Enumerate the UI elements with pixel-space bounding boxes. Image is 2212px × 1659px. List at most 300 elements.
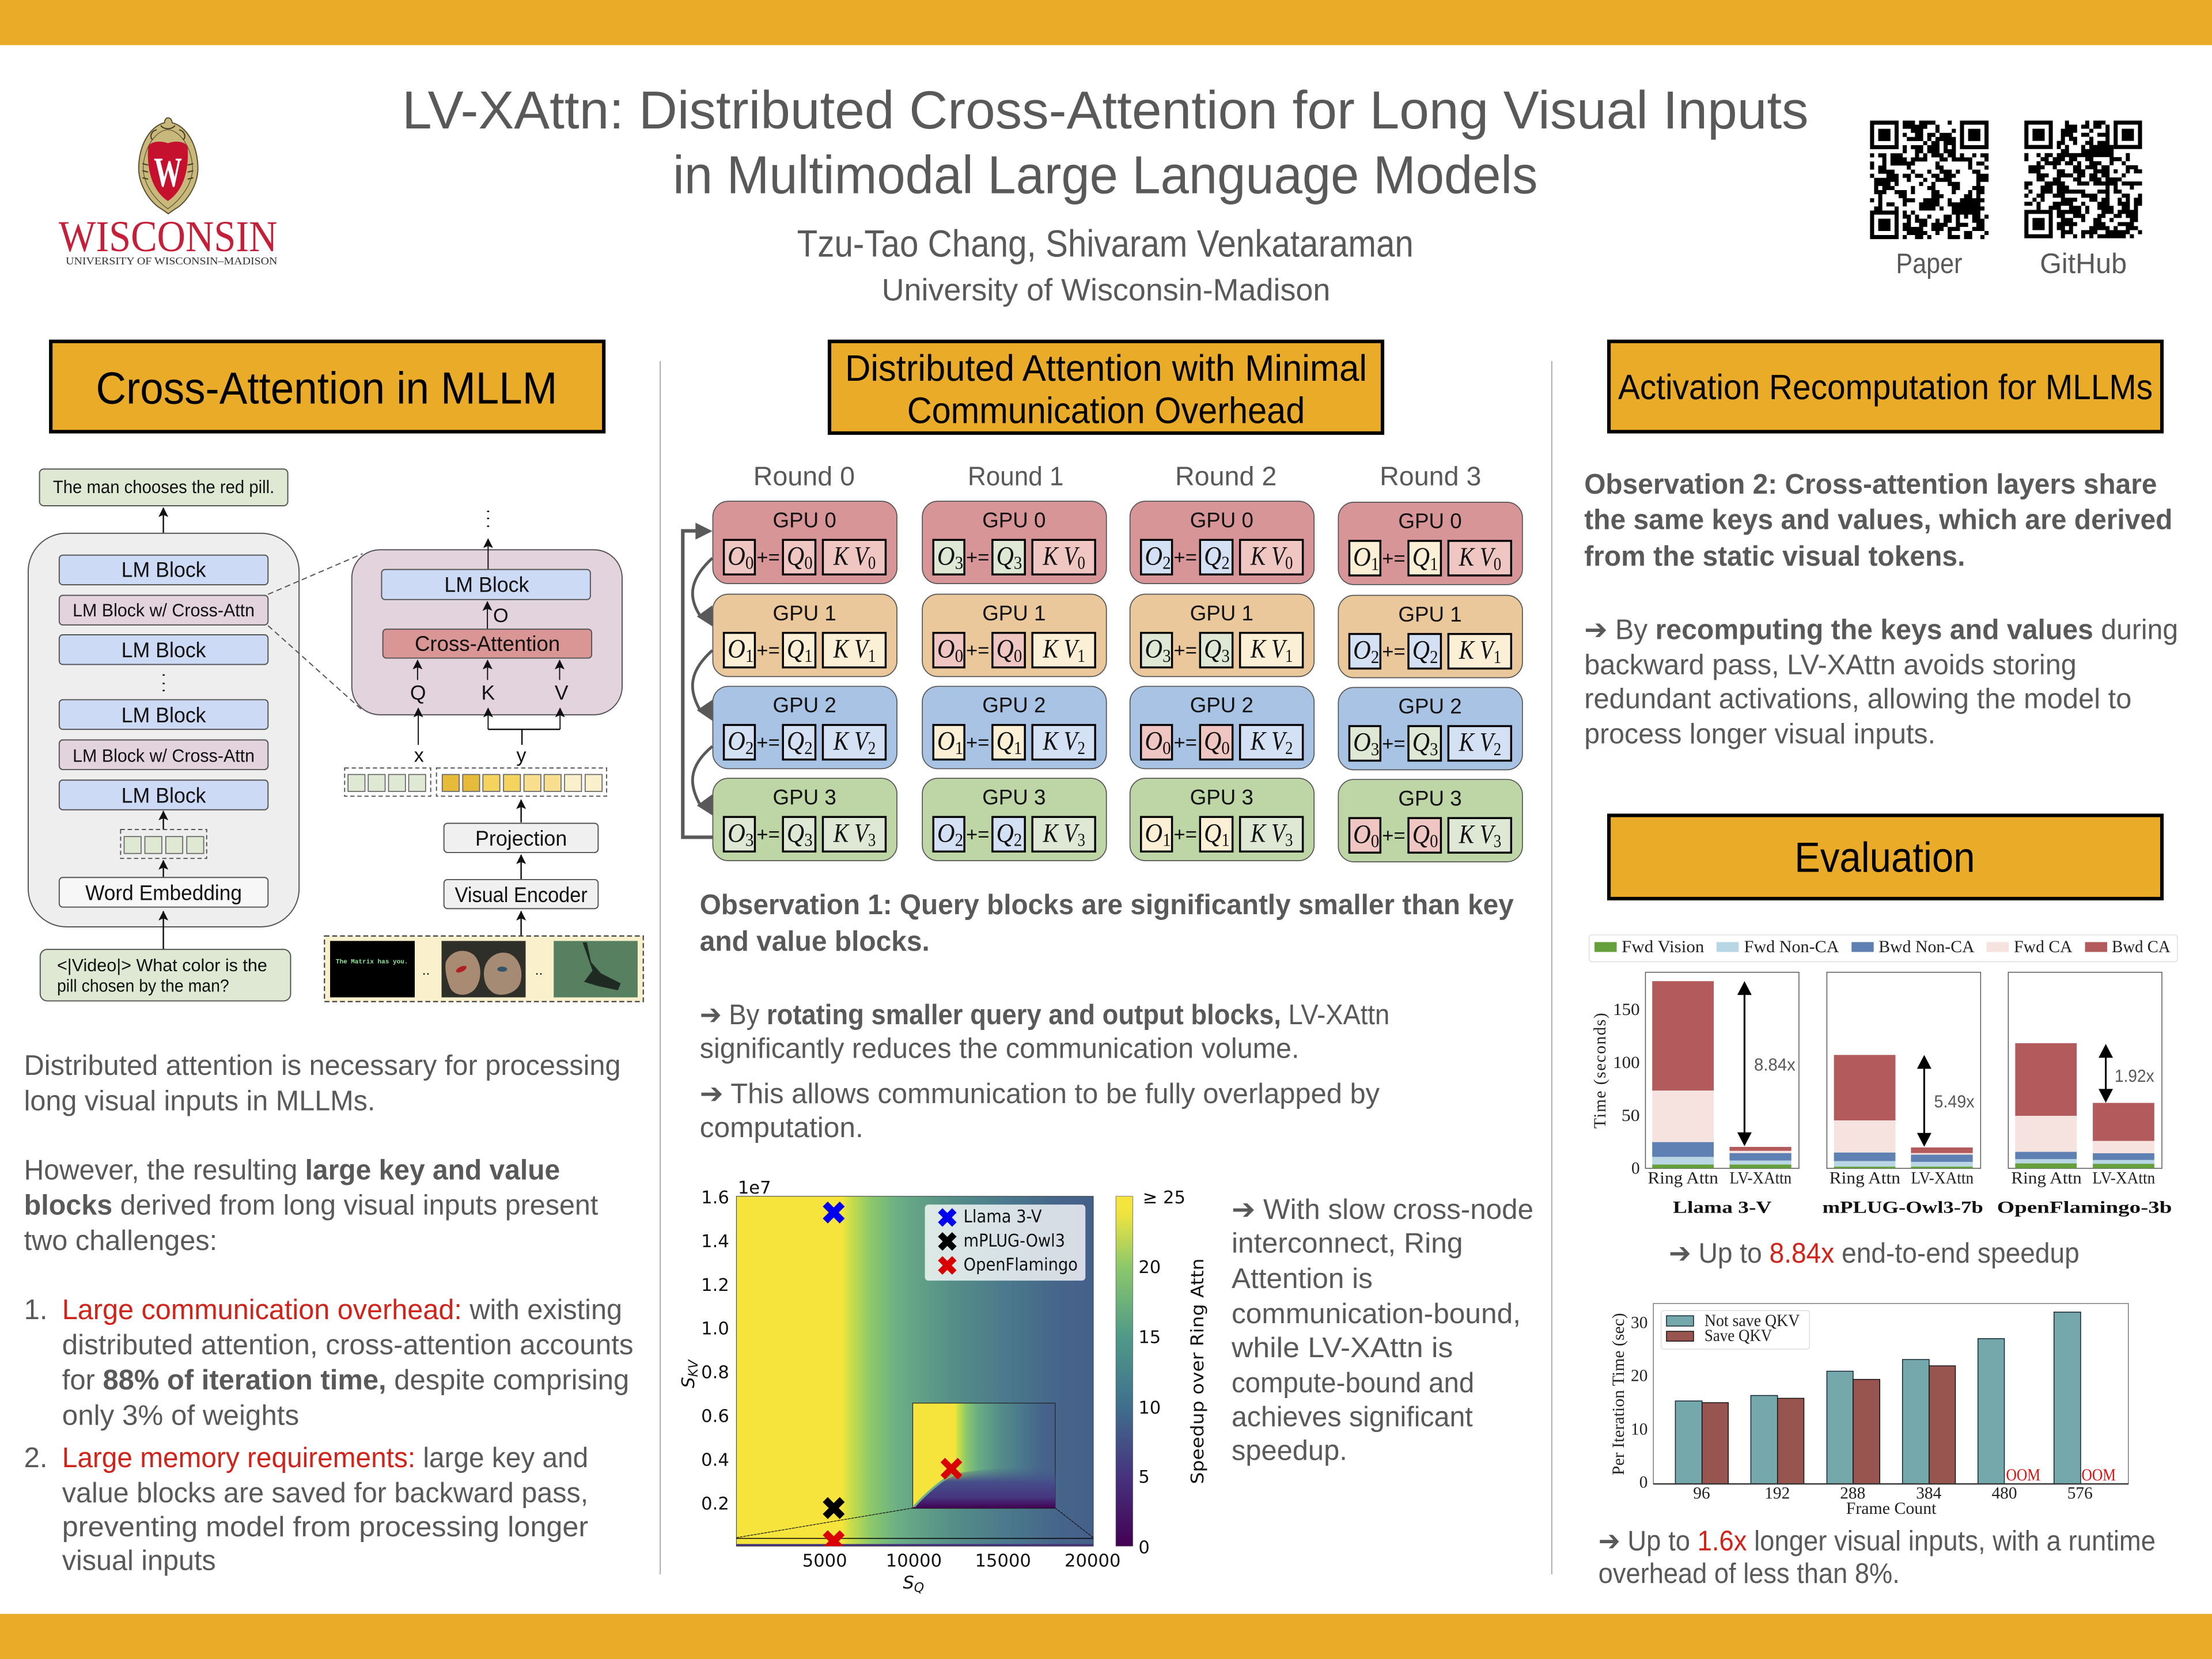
round headers: Round 1 [968, 461, 1064, 491]
colorbar: 5 [1138, 1467, 1150, 1487]
y-axis ticks: 1.0 [701, 1319, 729, 1339]
output box [40, 469, 288, 506]
cell: round 2 GPU 1: 1 [1285, 646, 1293, 666]
y-axis ticks: 0.6 [701, 1407, 729, 1427]
x-axis ticks: 5000 [802, 1551, 847, 1571]
cell: round 3 GPU 0: 0 [1494, 554, 1501, 574]
inset zoom [912, 1403, 1055, 1508]
cell: round 1 GPU 1: 0 [955, 646, 963, 666]
stacked bar chart: end-to-end time [1589, 935, 2177, 1217]
projection box [444, 823, 598, 853]
panel: Llama 3-V: LV-XAttn [1729, 1169, 1791, 1188]
cell: round 3 GPU 1: 1 [1494, 647, 1501, 667]
text block: left column: preventing model from processing longer [62, 1512, 588, 1543]
cell: round 3 GPU 0: Q [1412, 543, 1431, 572]
panel: Llama 3-V: Ring Attn [1647, 1169, 1718, 1188]
model names: Llama 3-V [1673, 1198, 1771, 1217]
heading: Activation Recomputation: Activation Recomputation for MLLMs [1618, 368, 2153, 407]
round headers: Round 0 [753, 461, 855, 491]
cell: round 3 GPU 2: GPU 2 [1398, 695, 1462, 718]
cell: round 1 GPU 3: 2 [1014, 830, 1022, 850]
text block: left column: only 3% of weights [62, 1400, 299, 1431]
y-axis label: KV [687, 1359, 701, 1377]
panel: OpenFlamingo-3b: 1.92x [2115, 1066, 2154, 1086]
y-axis ticks: 1e7 [738, 1178, 771, 1198]
text block: left column: 1. [24, 1294, 47, 1325]
round headers: Round 3 [1380, 461, 1481, 491]
cell: round 1 GPU 0: 0 [1078, 553, 1085, 573]
text block: observation 1: ➔ This allows communication to be fully overlapped by [700, 1078, 1380, 1109]
cell: round 0 GPU 1: K V [834, 635, 874, 664]
y-axis label: S [679, 1377, 699, 1388]
y-axis ticks: 0 [1631, 1160, 1640, 1178]
cell: round 3 GPU 1: += [1382, 641, 1406, 662]
cell: round 2 GPU 3: += [1174, 824, 1197, 846]
cell: round 2 GPU 1: O [1145, 635, 1164, 664]
panel: OpenFlamingo-3b [2008, 972, 2162, 1188]
cell: round 1 GPU 0: Q [996, 541, 1016, 571]
cell: round 0 GPU 2: Q [787, 727, 806, 756]
cell: round 3 GPU 3: GPU 3 [1398, 786, 1462, 810]
heading: Distributed Attention [830, 342, 1382, 433]
callout: 8.84x speedup: ➔ Up to 8.84x end-to-end speedup [1669, 1238, 2080, 1269]
logo: University of Wisconsin-Madison [59, 118, 277, 267]
cell: round 0 GPU 2: GPU 2 [773, 694, 836, 717]
cell: round 2 GPU 1: Q [1204, 635, 1224, 664]
text block: observation 2 [1584, 469, 2178, 750]
cross-attention block detail [352, 511, 622, 715]
cell: round 2 GPU 0: GPU 0 [1190, 508, 1253, 532]
x-axis ticks: 15000 [975, 1551, 1031, 1571]
cell: round 2 GPU 3 [1130, 778, 1314, 861]
wordmark: WISCONSIN [59, 213, 277, 261]
y-axis ticks: 100 [1613, 1054, 1640, 1072]
cell: round 1 GPU 0: 3 [955, 553, 963, 573]
text block: interconnect note: ➔ With slow cross-node [1232, 1194, 1533, 1225]
cell: round 2 GPU 2: GPU 2 [1190, 694, 1253, 717]
cell: round 2 GPU 3: GPU 3 [1190, 785, 1253, 809]
cell: round 0 GPU 2: 2 [868, 738, 876, 758]
video frames: .. [535, 963, 543, 978]
cell: round 1 GPU 0: += [966, 547, 989, 569]
cross-attention block detail: Cross-Attention [415, 632, 560, 656]
legend: Fwd Vision [1622, 938, 1705, 956]
panel: Llama 3-V [1645, 972, 1799, 1188]
cell: round 2 GPU 2: 0 [1162, 738, 1171, 758]
y-axis ticks: 1.6 [701, 1188, 729, 1208]
text block: observation 2: ➔ By recomputing the keys and values during [1584, 614, 2178, 645]
x-axis ticks: 576 [2067, 1484, 2093, 1502]
cell: round 2 GPU 1: += [1174, 639, 1197, 661]
round headers [753, 461, 1481, 491]
cell: round 1 GPU 2: O [937, 727, 956, 756]
cell: round 0 GPU 0 [713, 501, 897, 584]
cell: round 0 GPU 3: K V [834, 819, 874, 848]
text block: observation 1: and value blocks. [700, 926, 930, 957]
cell: round 3 GPU 3: 3 [1494, 831, 1501, 851]
text block: observation 2: the same keys and values, which are derived [1584, 504, 2172, 535]
text block: observation 2: from the static visual tokens. [1584, 541, 1965, 572]
cell: round 2 GPU 3: 1 [1162, 830, 1171, 850]
legend: Bwd Non-CA [1878, 938, 1975, 956]
frame: the matrix text [330, 941, 415, 997]
cell: round 3 GPU 3: Q [1412, 820, 1431, 849]
cell: round 3 GPU 0: O [1353, 543, 1373, 572]
cell: round 2 GPU 0: Q [1204, 541, 1224, 571]
cell: round 3 GPU 3: 0 [1371, 831, 1379, 851]
cell: round 0 GPU 0: 0 [868, 553, 876, 573]
cell: round 1 GPU 1: O [937, 635, 956, 664]
cell: round 1 GPU 3 [922, 778, 1107, 861]
cell: round 0 GPU 1: 1 [804, 646, 813, 666]
cell: round 0 GPU 1 [713, 594, 897, 677]
input prompt box: <|Video|> What color is the [57, 956, 267, 975]
text block: left column: visual inputs [62, 1546, 216, 1577]
language model stack: LM Block [122, 558, 206, 582]
y-axis title: Per Iteration Time (sec) [1609, 1313, 1628, 1475]
cell: round 2 GPU 0: K V [1251, 541, 1291, 571]
video frames [324, 936, 643, 1002]
text block: interconnect note: Attention is [1232, 1263, 1373, 1294]
cell: round 1 GPU 0: GPU 0 [982, 508, 1046, 532]
y-axis ticks [701, 1178, 771, 1514]
cell: round 0 GPU 3: += [756, 824, 780, 846]
title [402, 80, 1809, 205]
cell: round 1 GPU 1: Q [996, 635, 1016, 664]
text block: observation 2: Observation 2: Cross-attention layers share [1584, 469, 2157, 500]
cell: round 0 GPU 1: GPU 1 [773, 601, 836, 625]
cell: round 2 GPU 3: 1 [1221, 830, 1230, 850]
legend: Not save QKV [1705, 1312, 1800, 1330]
cross-attention block detail: LM Block [444, 573, 529, 596]
callout: longer visual inputs: ➔ Up to 1.6x longer visual inputs, with a runtime [1599, 1525, 2156, 1556]
cell: round 3 GPU 1: K V [1459, 636, 1500, 665]
heading: Cross-Attention in MLLM [51, 342, 604, 431]
frame: pills in hands [442, 941, 525, 997]
text block: left column: distributed attention, cross-attention accounts [62, 1330, 634, 1361]
cell: round 0 GPU 1: 1 [868, 646, 876, 666]
round headers: Round 2 [1175, 461, 1277, 491]
cell: round 3 GPU 0 [1338, 502, 1522, 585]
cell: round 3 GPU 1: 2 [1430, 647, 1438, 667]
cell: round 3 GPU 1: GPU 1 [1398, 603, 1462, 626]
cell: round 2 GPU 2: Q [1204, 727, 1224, 756]
output box: The man chooses the red pill. [53, 476, 274, 497]
x-axis label: S [903, 1573, 914, 1593]
cell: round 3 GPU 3: K V [1459, 820, 1500, 849]
OOM labels [2006, 1466, 2116, 1484]
bars: frame counts [1653, 1312, 2128, 1484]
cell: round 1 GPU 1: += [966, 639, 989, 661]
x-axis ticks: 480 [1991, 1484, 2017, 1502]
text block: observation 1: computation. [700, 1112, 863, 1143]
text block: observation 1 [700, 889, 1514, 1143]
legend: Bwd CA [2112, 938, 2171, 956]
token labels: x [414, 744, 424, 766]
heading: Distributed Attention: Communication Overhead [907, 391, 1305, 431]
cell: round 3 GPU 2: 3 [1430, 739, 1438, 759]
QR code: GitHub [2024, 123, 2142, 236]
model names: mPLUG-Owl3-7b [1823, 1198, 1983, 1217]
cell: round 1 GPU 2: 1 [955, 738, 963, 758]
input prompt box [40, 949, 290, 1001]
y-axis ticks: 0.2 [701, 1494, 729, 1514]
cell: round 2 GPU 0 [1130, 501, 1314, 584]
legend: OpenFlamingo [964, 1255, 1078, 1275]
cell: round 2 GPU 1: K V [1251, 635, 1291, 664]
cell: round 3 GPU 0: += [1382, 548, 1406, 570]
panel: Llama 3-V: 8.84x [1754, 1055, 1796, 1074]
cell: round 2 GPU 0: 0 [1285, 553, 1293, 573]
heading: Evaluation [1609, 816, 2162, 899]
cell: round 1 GPU 1: K V [1043, 635, 1084, 664]
y-axis ticks: 0.8 [701, 1363, 729, 1383]
callout: longer visual inputs: overhead of less than 8%. [1599, 1558, 1900, 1589]
cell: round 3 GPU 2: K V [1459, 728, 1500, 757]
cell: round 1 GPU 1: GPU 1 [982, 601, 1046, 625]
cell: round 1 GPU 2: K V [1043, 727, 1084, 756]
cell: round 0 GPU 3: O [728, 819, 747, 848]
text block: left column: value blocks are saved for backward pass, [62, 1478, 588, 1509]
text block: observation 1: Observation 1: Query blocks are significantly smaller than key [700, 889, 1514, 921]
cell: round 0 GPU 2: += [756, 732, 780, 753]
cell: round 2 GPU 2 [1130, 686, 1314, 768]
y-axis ticks: 0 [1639, 1473, 1647, 1491]
panel: mPLUG-Owl3-7b: Ring Attn [1830, 1169, 1900, 1188]
cell: round 1 GPU 0: K V [1043, 541, 1084, 571]
cell: round 2 GPU 3: Q [1204, 819, 1224, 848]
cell: round 2 GPU 2: 0 [1221, 738, 1230, 758]
cell: round 3 GPU 2: Q [1412, 728, 1431, 757]
y-axis ticks: 30 [1631, 1314, 1647, 1332]
y-axis ticks: 150 [1613, 1001, 1640, 1019]
icon: crest: W [154, 149, 182, 195]
text block: observation 1: ➔ By rotating smaller query and output blocks, LV-XAttn [700, 999, 1389, 1031]
cross-attention block detail: V [555, 681, 569, 704]
text block: interconnect note: while LV-XAttn is [1231, 1332, 1453, 1363]
cell: round 2 GPU 0: 2 [1221, 553, 1230, 573]
legend: Fwd Non-CA [1744, 938, 1839, 956]
text block: interconnect note: speedup. [1232, 1435, 1347, 1467]
y-axis ticks: 50 [1622, 1107, 1640, 1125]
legend: mPLUG-Owl3 [964, 1231, 1065, 1251]
cell: round 0 GPU 0: += [756, 547, 780, 569]
token labels [414, 744, 527, 766]
x-axis label: Q [914, 1581, 924, 1596]
cell: round 1 GPU 2: 2 [1078, 738, 1085, 758]
text tokens [344, 768, 431, 796]
bar chart: per iteration time [1609, 1304, 2128, 1518]
cell: round 2 GPU 3: K V [1251, 819, 1291, 848]
cell: round 0 GPU 2: K V [834, 727, 874, 756]
cell: round 3 GPU 1 [1338, 595, 1522, 677]
text block: left column: Large memory requirements: large key and [62, 1442, 588, 1474]
cell: round 0 GPU 1: += [756, 639, 780, 661]
cell: round 3 GPU 2: 3 [1371, 739, 1379, 759]
label: GitHub: GitHub [2040, 248, 2127, 279]
cell: round 3 GPU 3: 0 [1430, 831, 1438, 851]
y-axis ticks [1631, 1314, 1647, 1491]
text block: interconnect note: communication-bound, [1232, 1298, 1521, 1330]
frame: action scene [554, 941, 638, 997]
cell: round 0 GPU 0: K V [834, 541, 874, 571]
text block: interconnect note [1231, 1194, 1533, 1467]
cell: round 2 GPU 0: O [1145, 541, 1164, 571]
y-axis ticks: 20 [1631, 1367, 1647, 1385]
cell: round 1 GPU 1 [922, 594, 1107, 677]
x-axis ticks [802, 1551, 1120, 1571]
language model stack: LM Block [122, 638, 206, 662]
y-axis title: Time (seconds) [1591, 1013, 1609, 1128]
language model stack: LM Block w/ Cross-Attn [73, 600, 255, 620]
cell: round 3 GPU 2: += [1382, 733, 1406, 755]
cell: round 2 GPU 2: O [1145, 727, 1164, 756]
cell: round 3 GPU 3: O [1353, 820, 1373, 849]
x-axis ticks: 20000 [1065, 1551, 1120, 1571]
cell: round 1 GPU 3: 2 [955, 830, 963, 850]
cell: round 0 GPU 0: GPU 0 [773, 508, 836, 532]
text block: interconnect note: compute-bound and [1232, 1368, 1474, 1399]
colorbar: 10 [1138, 1398, 1161, 1418]
top banner [0, 0, 2212, 45]
text block: observation 2: redundant activations, allowing the model to [1584, 683, 2131, 714]
token labels: y [516, 744, 527, 766]
cross-attention block detail: K [482, 681, 495, 704]
title: in Multimodal Large Language Models [673, 145, 1537, 205]
y-axis ticks: 0.4 [701, 1450, 729, 1470]
language model stack [28, 533, 299, 927]
wordmark subtitle: UNIVERSITY OF WISCONSIN–MADISON [66, 255, 277, 267]
legend: Save QKV [1705, 1327, 1772, 1345]
cell: round 3 GPU 3: += [1382, 825, 1406, 847]
cell: round 1 GPU 2: GPU 2 [982, 694, 1046, 717]
cell: round 0 GPU 2 [713, 686, 897, 768]
cell: round 3 GPU 2: O [1353, 728, 1373, 757]
cross-attention block detail: Q [410, 681, 426, 704]
cell: round 2 GPU 3: 3 [1285, 830, 1293, 850]
y-axis ticks: 1.4 [701, 1232, 729, 1252]
title: LV-XAttn: Distributed Cross-Attention for Long Visual Inputs [402, 80, 1809, 140]
cell: round 3 GPU 0: GPU 0 [1398, 509, 1462, 533]
cell: round 2 GPU 3: O [1145, 819, 1164, 848]
projection box: Projection [475, 827, 567, 850]
cell: round 2 GPU 0: += [1174, 547, 1197, 569]
text block: left column: long visual inputs in MLLMs. [24, 1085, 375, 1116]
cell: round 1 GPU 3: Q [996, 819, 1016, 848]
heading: Distributed Attention: Distributed Attention with Minimal [845, 348, 1367, 389]
text block: interconnect note: achieves significant [1232, 1402, 1473, 1433]
cell: round 3 GPU 3 [1338, 779, 1522, 862]
cell: round 1 GPU 3: O [937, 819, 956, 848]
cell: round 2 GPU 1 [1130, 594, 1314, 677]
heatmap field [736, 1196, 1093, 1546]
language model stack: LM Block w/ Cross-Attn [73, 745, 255, 766]
cell: round 1 GPU 3: GPU 3 [982, 785, 1046, 809]
cell: round 3 GPU 0: K V [1459, 543, 1500, 572]
text block: left column: Large communication overhead: with existing [62, 1294, 622, 1325]
colorbar label: Speedup over Ring Attn [1188, 1258, 1208, 1484]
panel: mPLUG-Owl3-7b: 5.49x [1934, 1092, 1975, 1111]
cell: round 0 GPU 3: Q [787, 819, 806, 848]
x-axis ticks: 288 [1840, 1484, 1865, 1502]
language model stack: LM Block [122, 703, 206, 727]
cell: round 3 GPU 2 [1338, 687, 1522, 770]
markers: model points [825, 1204, 842, 1550]
cell: round 1 GPU 1: 0 [1014, 646, 1022, 666]
text block: left column [24, 1050, 634, 1577]
cell: round 2 GPU 1: 3 [1221, 646, 1230, 666]
cell: round 0 GPU 1: 1 [745, 646, 753, 666]
cell: round 0 GPU 2: O [728, 727, 747, 756]
cell: round 0 GPU 3 [713, 778, 897, 861]
visual encoder box: Visual Encoder [455, 883, 588, 907]
cell: round 1 GPU 2: 1 [1014, 738, 1022, 758]
QR code: paper [1870, 123, 1988, 237]
OOM labels: OOM [2006, 1466, 2040, 1484]
colorbar: 20 [1138, 1257, 1161, 1278]
text block: left column: two challenges: [24, 1225, 217, 1256]
x-axis ticks: 10000 [886, 1551, 942, 1571]
cell: round 1 GPU 2: += [966, 732, 989, 753]
cell: round 3 GPU 1: O [1353, 636, 1373, 665]
heading: Cross-Attention in MLLM: Cross-Attention in MLLM [96, 362, 557, 413]
cell: round 0 GPU 0: O [728, 541, 747, 571]
language model stack: Word Embedding [85, 881, 242, 904]
legend [1589, 935, 2177, 961]
cell: round 2 GPU 1: 3 [1162, 646, 1171, 666]
cell: round 2 GPU 0: 2 [1162, 553, 1171, 573]
video frames: .. [422, 963, 430, 978]
heading: Activation Recomputation [1609, 342, 2162, 431]
frame [1653, 1304, 2128, 1484]
icon: crest [139, 118, 198, 214]
cell: round 0 GPU 0: 0 [804, 553, 813, 573]
x-axis ticks: 96 [1693, 1484, 1710, 1502]
cell: round 1 GPU 0: O [937, 541, 956, 571]
legend: Fwd CA [2014, 938, 2073, 956]
cell: round 1 GPU 2 [922, 686, 1107, 768]
cell: round 0 GPU 2: 2 [804, 738, 813, 758]
diagram: rotating attention rounds [683, 461, 1522, 862]
cell: round 0 GPU 3: GPU 3 [773, 785, 836, 809]
cell: round 2 GPU 2: += [1174, 732, 1197, 753]
y-axis ticks: 1.2 [701, 1275, 729, 1296]
text block: observation 2: backward pass, LV-XAttn avoids storing [1584, 650, 2077, 681]
affiliation: University of Wisconsin-Madison [882, 273, 1330, 308]
label: Paper: Paper [1896, 248, 1963, 279]
colorbar [1116, 1188, 1185, 1558]
cell: round 0 GPU 0: 0 [745, 553, 753, 573]
cell: round 1 GPU 0 [922, 501, 1107, 584]
y-axis ticks: 10 [1631, 1420, 1647, 1438]
text block: left column: Distributed attention is necessary for processing [24, 1050, 621, 1081]
cell: round 1 GPU 2: Q [996, 727, 1016, 756]
cell: round 3 GPU 0: 1 [1430, 554, 1438, 574]
text block: observation 1: significantly reduces the communication volume. [700, 1033, 1300, 1065]
legend [925, 1205, 1085, 1281]
cell: round 3 GPU 0: 1 [1371, 554, 1379, 574]
x-axis ticks: 192 [1764, 1484, 1790, 1502]
colorbar: 15 [1138, 1327, 1161, 1347]
text block: left column: for 88% of iteration time, despite comprising [62, 1365, 629, 1396]
cell: round 2 GPU 2: K V [1251, 727, 1291, 756]
cell: round 0 GPU 3: 3 [804, 830, 813, 850]
cross-attention block detail: O [493, 605, 509, 627]
cell: round 0 GPU 1: Q [787, 635, 806, 664]
text block: left column: However, the resulting large key and value [24, 1154, 560, 1185]
cell: round 1 GPU 3: 3 [1078, 830, 1085, 850]
cell: round 3 GPU 1: Q [1412, 636, 1431, 665]
